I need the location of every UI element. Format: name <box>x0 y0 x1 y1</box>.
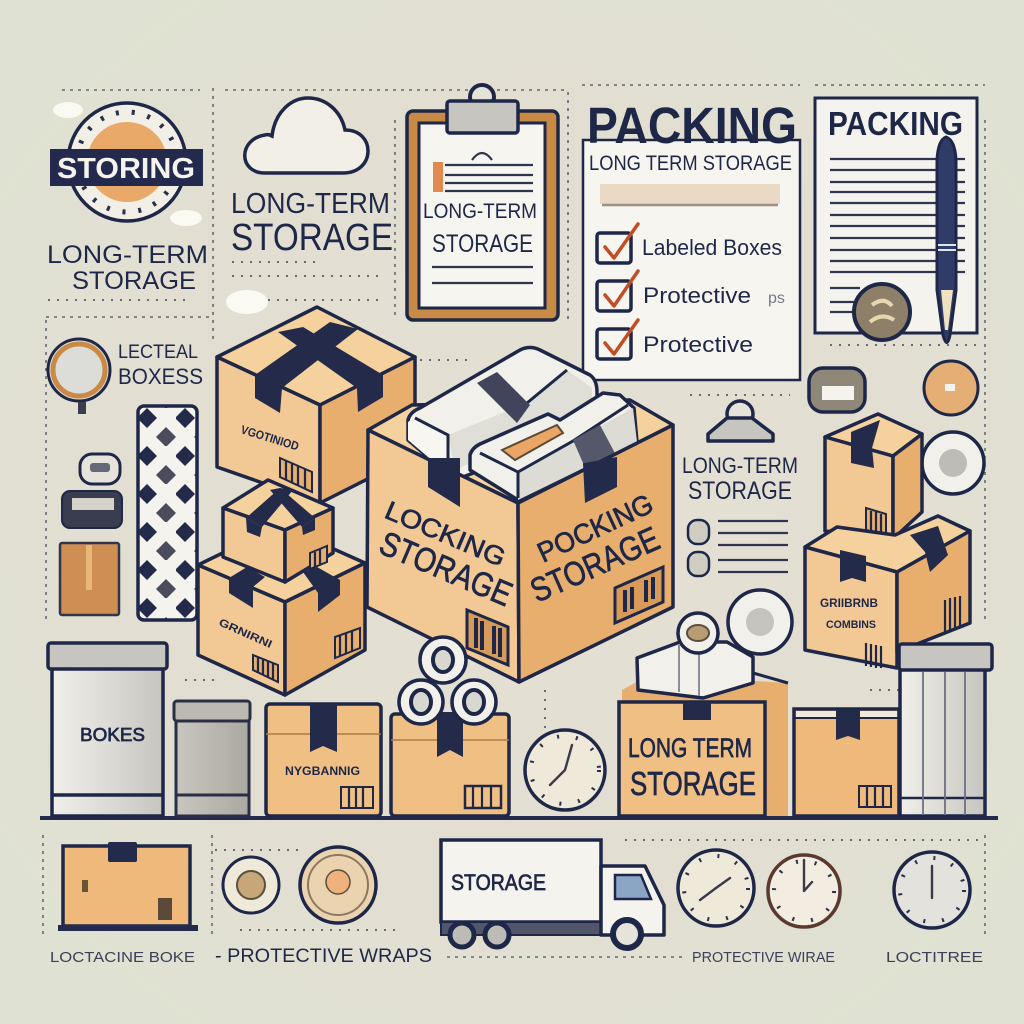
big box right label: POCKING <box>532 488 658 568</box>
caption: loctitree: LOCTITREE <box>886 949 983 966</box>
panel: right box stack <box>805 414 970 668</box>
heading: long-term storage large: LONG-TERM <box>231 188 390 220</box>
check item: protective: ps <box>768 290 785 307</box>
icon: wall clock <box>525 730 605 810</box>
icon: tag <box>80 454 120 484</box>
icon: wrapping roll <box>138 406 197 620</box>
icon: tape dispenser <box>809 368 865 412</box>
can: left <box>48 643 167 816</box>
caption: locating boxes: LOCTACINE BOKE <box>50 949 195 966</box>
checklist paper <box>583 140 800 380</box>
wrap bundle: front <box>470 393 637 500</box>
panel: packing document <box>815 98 977 342</box>
check item: protective: Protective <box>643 283 751 308</box>
box: shelf right <box>794 709 899 816</box>
icon: magnifier <box>48 339 110 414</box>
big box barcodes <box>467 567 663 665</box>
note heading: STORAGE <box>688 477 792 505</box>
panel: clipboard <box>407 85 558 320</box>
icon: tape roll small <box>223 857 279 913</box>
icon: small clip <box>708 401 773 441</box>
check item: labeled boxes: Labeled Boxes <box>642 235 782 260</box>
box: shelf two <box>391 712 509 816</box>
panel: central box pile <box>198 307 673 695</box>
icon: small clouds <box>53 102 268 314</box>
wrap bundle: back <box>408 348 597 480</box>
document heading: PACKING <box>828 105 963 142</box>
clipboard text: LONG-TERM <box>423 200 537 223</box>
label: labeled boxes: BOXESS <box>118 364 203 389</box>
panel: packing checklist <box>583 97 800 380</box>
can: left: BOKES <box>80 725 145 745</box>
icon: tape roll large <box>300 847 376 923</box>
heading: long-term storage large: STORAGE <box>231 217 393 259</box>
note rows <box>688 520 788 576</box>
clipboard paper <box>419 123 545 308</box>
panel: left small icons <box>48 339 203 620</box>
check item: protective second: Protective <box>643 332 753 357</box>
box: flat <box>58 842 198 931</box>
panel: bottom row <box>50 840 983 967</box>
box: shelf one: NYGBANNIG <box>285 764 360 778</box>
can: small <box>174 701 250 816</box>
box: big central <box>367 425 673 682</box>
icon: pen <box>937 137 956 342</box>
check item: protective <box>597 271 785 311</box>
clipboard text: STORAGE <box>432 230 533 258</box>
big box right label: STORAGE <box>525 520 665 610</box>
box: long term storage: LONG TERM <box>628 733 752 763</box>
caption: protective wrap: PROTECTIVE WIRAE <box>692 949 835 966</box>
heading: packing: PACKING <box>587 97 797 154</box>
heading: long-term storage small: LONG-TERM <box>47 241 208 269</box>
icon: wrapped package and rolls <box>637 590 792 698</box>
sand bar <box>600 184 780 205</box>
box: top left: VGOTINIOD <box>239 422 301 453</box>
icon: tape rolls <box>399 637 496 724</box>
box: upper right <box>825 414 922 539</box>
clipboard lines <box>432 153 533 283</box>
caption: protective wraps: - PROTECTIVE WRAPS <box>215 946 432 967</box>
icon: storing circle <box>68 103 186 221</box>
shelf line <box>40 816 998 820</box>
box: small middle <box>223 480 333 582</box>
icon: orange disc <box>924 361 978 415</box>
box: lower left: GRNIRNI <box>217 617 274 651</box>
icon: delivery truck <box>441 840 664 948</box>
heading: long-term storage small <box>47 241 208 295</box>
box: long term storage: STORAGE <box>630 765 756 802</box>
label: labeled boxes <box>118 342 203 389</box>
box: long term storage <box>618 673 788 816</box>
clipboard board <box>407 111 558 320</box>
panel: bottom shelf <box>40 590 998 820</box>
icon: seal <box>854 284 910 340</box>
box: lower right: COMBINS <box>826 619 876 631</box>
icon: brown box <box>60 543 119 615</box>
panel: long-term storage note <box>682 401 798 576</box>
box: top left <box>217 307 415 503</box>
icon: cloud <box>245 98 368 173</box>
heading: long-term storage large <box>231 188 393 259</box>
panel: right small icons <box>809 361 984 494</box>
label: labeled boxes: LECTEAL <box>118 342 198 363</box>
box: lower left <box>198 525 365 695</box>
document lines <box>830 159 965 312</box>
big box inner walls <box>368 400 673 503</box>
big box left label: LOCKING <box>381 495 510 573</box>
box: lower right: GRIIBRNB <box>820 596 878 610</box>
icon: clock two <box>768 855 840 927</box>
icon: clock one <box>678 850 754 926</box>
icon: clip <box>447 85 518 133</box>
note heading: LONG-TERM <box>682 453 798 478</box>
clipboard orange tag <box>433 162 443 192</box>
check item: protective second <box>597 320 753 359</box>
storing banner: STORING <box>57 153 195 185</box>
clipboard text <box>423 200 537 258</box>
icon: clock three <box>894 852 970 928</box>
big box left label <box>374 495 518 614</box>
note heading <box>682 453 798 505</box>
icon: tape holder <box>62 491 122 528</box>
box: lower right <box>805 516 970 668</box>
subheading: LONG TERM STORAGE <box>589 152 792 175</box>
panel: cloud and heading <box>231 98 393 259</box>
big box left label: STORAGE <box>374 524 518 614</box>
panel: storing badge <box>47 102 268 314</box>
document paper <box>815 98 977 333</box>
can: right <box>899 644 992 816</box>
icon: delivery truck: STORAGE <box>451 870 546 895</box>
heading: long-term storage small: STORAGE <box>72 267 196 295</box>
box: shelf one <box>266 704 381 816</box>
check item: labeled boxes <box>597 224 782 263</box>
icon: white badge <box>922 432 984 494</box>
